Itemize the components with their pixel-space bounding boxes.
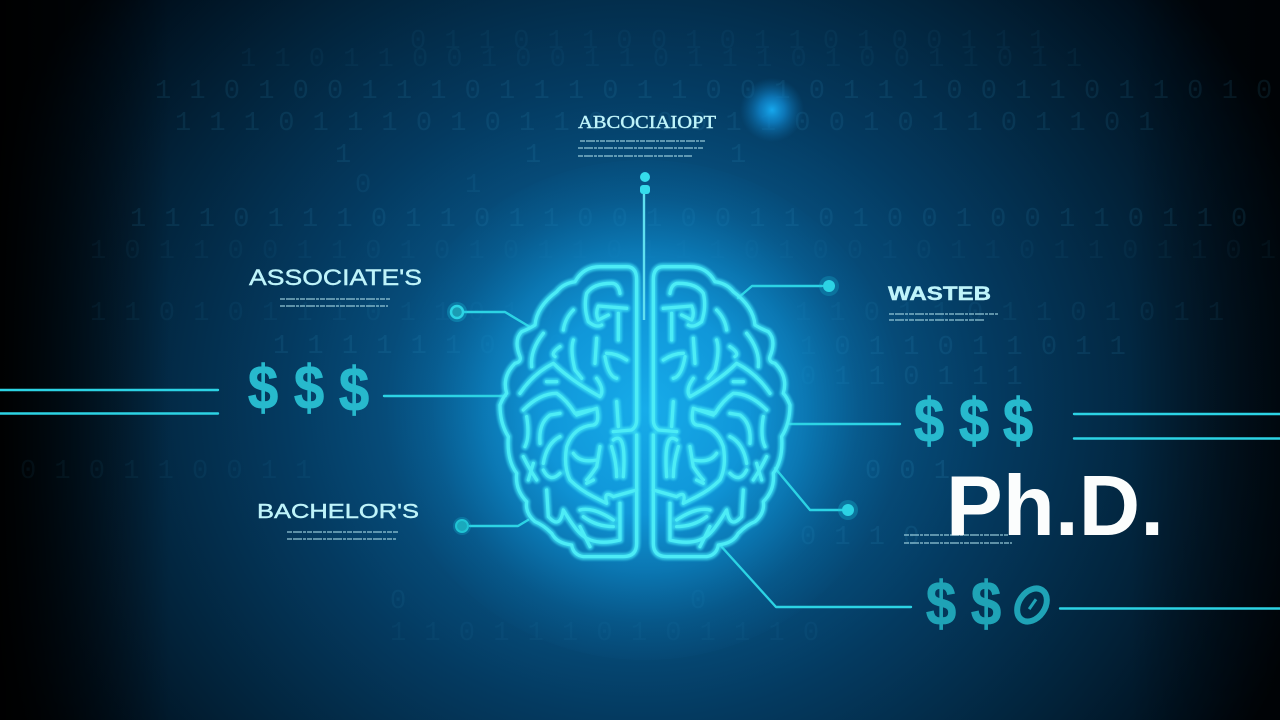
dollar signs: bottom [926,570,1001,639]
dollar signs: right: $ [959,387,989,456]
binary digit backdrop: 0 1 1 0 1 1 0 0 1 0 1 1 0 1 0 0 1 1 1 [410,27,1046,57]
binary digit backdrop: 1 1 1 0 1 1 1 0 1 0 1 1 0 1 0 0 1 1 0 0 1 0 1 1 0 1 1 0 1 [175,109,1156,139]
left connector lines [0,312,530,526]
binary digit backdrop: 1 1 1 0 1 1 1 0 1 1 0 1 1 0 0 1 0 0 1 1 0 1 0 0 1 0 0 1 1 0 1 1 0 [130,205,1248,235]
binary digit backdrop: 0 0 1 [865,457,951,487]
binary digit backdrop: 1 0 1 1 0 1 1 0 1 1 [800,333,1127,363]
node: bachelor [453,517,471,535]
binary digit backdrop: 1 1 0 1 1 1 0 1 0 1 1 1 0 [390,619,820,649]
binary digit backdrop: 1 1 0 1 1 0 0 1 0 0 1 1 0 1 1 1 0 1 0 0 1 1 0 1 1 [240,45,1083,75]
binary digit backdrop: 0 [690,587,707,617]
top connector line [643,188,645,320]
dollar signs: left: $ [248,354,278,423]
dollar signs: left [248,354,369,425]
binary digit backdrop: 1 [465,171,482,201]
dollar signs: left: $ [294,354,324,423]
binary digit backdrop: 0 [355,171,372,201]
right connector lines [720,286,1280,608]
node: master [819,276,839,296]
glowing spot top [740,78,804,142]
node: associate [447,302,467,322]
binary digit backdrop: 0 1 1 0 1 1 1 [800,363,1024,393]
binary digit backdrop: 1 1 1 1 1 1 0 1 0 [273,332,565,362]
dollar signs: right: $ [1003,387,1033,456]
binary digit backdrop: 1 1 0 1 1 0 1 1 0 1 0 1 1 [795,299,1225,329]
dollar signs: bottom: $ [926,570,956,639]
title: Ph.D.: Ph.D. [946,459,1164,554]
heading: top label: ABCOCIAIOPT [578,112,716,132]
text lines: phd [904,535,1012,543]
brain soft glow [500,267,790,557]
dollar signs: left: $ [339,356,369,425]
binary digit backdrop: 0 1 1 0 [800,523,920,553]
text lines: master's [889,314,998,320]
binary digit backdrop: 1 1 0 1 0 1 1 1 0 1 1 0 1 0 [90,299,554,329]
binary digit backdrop: 0 1 0 1 1 0 0 1 1 [20,457,312,487]
text lines: associate's [280,299,390,306]
binary digit backdrop: 1 [335,141,352,171]
binary digit backdrop: 1 0 1 1 0 0 1 1 0 1 0 1 0 1 1 0 1 1 1 0 1 0 0 1 0 1 1 0 1 1 0 1 1 0 1 1 [90,237,1280,267]
dollar signs: right [914,387,1033,456]
text lines: bachelor's [287,532,398,539]
text lines: top label [578,141,705,156]
node: top [640,172,650,194]
brain outline [500,267,790,557]
dollar signs: right: $ [914,387,944,456]
binary digit backdrop: 1 [730,141,747,171]
heading: master's: WASTEB [888,284,991,305]
heading: associate's: ASSOCIATE'S [249,265,422,290]
binary digit backdrop: 0 [390,587,407,617]
dollar signs: bottom: $ [971,570,1001,639]
icon: tilted coin [1011,583,1053,627]
brain glow halo [385,160,905,660]
node: phd [838,500,858,520]
heading: bachelor's: BACHELOR'S [257,501,419,523]
binary digit backdrop: 1 [525,141,542,171]
